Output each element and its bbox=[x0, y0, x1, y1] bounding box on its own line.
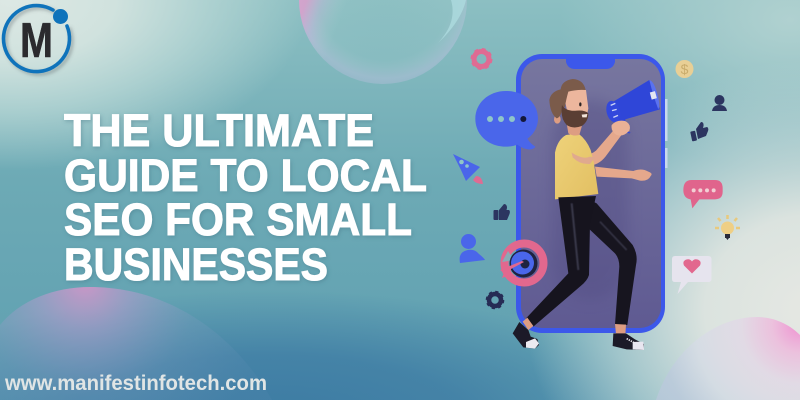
ankles bbox=[523, 318, 533, 330]
neck bbox=[567, 123, 583, 136]
icon: pink speech bubble bbox=[683, 180, 723, 208]
icon: dark person bbox=[712, 95, 727, 111]
speech bubble: blue bbox=[475, 91, 538, 149]
icon: rocket bbox=[453, 154, 483, 184]
person with megaphone, upper body bbox=[549, 79, 660, 199]
logo bbox=[3, 6, 72, 74]
front leg bbox=[526, 196, 596, 327]
right shoe bbox=[613, 333, 644, 350]
icon: dark gear bbox=[487, 292, 503, 308]
person with megaphone, lower body bbox=[513, 196, 644, 350]
icon: dark thumb up, left bbox=[494, 204, 510, 220]
right arm (raised) bbox=[575, 127, 624, 166]
hair bbox=[549, 79, 586, 118]
logo: M bbox=[20, 14, 53, 68]
title: BUSINESSES bbox=[64, 239, 328, 290]
bubble: bottom left bbox=[0, 287, 272, 400]
title: GUIDE TO LOCAL bbox=[64, 150, 427, 201]
title: THE ULTIMATE bbox=[64, 105, 374, 156]
icon: dollar coin bbox=[676, 60, 694, 78]
icon: dollar coin: $ bbox=[681, 61, 689, 77]
icon: pink gear bbox=[472, 50, 491, 68]
icon: target with arrow bbox=[500, 244, 544, 282]
ear bbox=[554, 115, 561, 124]
icon: blue person bbox=[460, 234, 485, 263]
shirt bbox=[555, 133, 598, 199]
icon: light bulb bbox=[715, 215, 740, 240]
phone bbox=[516, 54, 668, 333]
icon: heart card bbox=[672, 256, 712, 294]
face bbox=[563, 87, 588, 117]
left shoe bbox=[513, 322, 539, 349]
beard bbox=[562, 105, 588, 127]
left arm (extended) bbox=[595, 167, 652, 181]
title: SEO FOR SMALL bbox=[64, 194, 412, 245]
hand on megaphone bbox=[612, 121, 630, 136]
icon: dark thumb up, right bbox=[690, 122, 708, 141]
megaphone bbox=[604, 80, 660, 133]
bubble: bottom right bbox=[656, 317, 800, 400]
title bbox=[64, 105, 427, 290]
website url: www.manifestinfotech.com bbox=[4, 372, 267, 395]
back leg bbox=[587, 200, 637, 325]
bubble: top centre bbox=[299, 0, 467, 84]
